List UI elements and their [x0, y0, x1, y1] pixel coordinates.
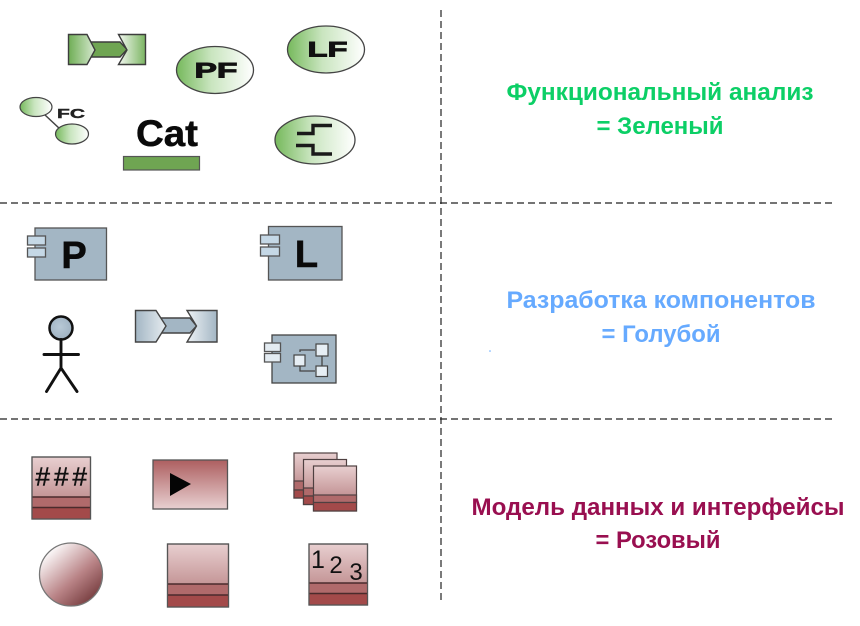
panel: data model and interface icons — [32, 453, 368, 607]
icon: play screen — [153, 460, 228, 509]
panel: component development icons — [28, 226, 491, 392]
icon: stacked tables — [294, 453, 356, 511]
icon: 123 table: 3 — [349, 559, 363, 586]
icon: P component — [28, 228, 106, 280]
icon: LF ellipse: LF — [308, 38, 348, 62]
icon: ### table: ### — [36, 462, 88, 492]
icon: ### table — [32, 457, 90, 519]
icon: plain table — [168, 544, 228, 607]
icon: blue connector — [136, 310, 217, 342]
icon: L component — [260, 226, 342, 280]
stray blue dot — [489, 350, 491, 352]
icon: actor stick figure — [44, 316, 78, 392]
icon: logical function ellipse — [275, 116, 355, 164]
icon: L component: L — [295, 234, 318, 276]
icon: PF ellipse: PF — [194, 60, 238, 82]
text block: functional analysis = green — [506, 79, 814, 140]
icon: FC linked ellipses — [20, 98, 88, 144]
icon: sphere — [40, 543, 102, 606]
text block: functional analysis = green: = Зеленый — [596, 113, 724, 140]
text block: component development = blue: Разработка компонентов — [506, 287, 816, 314]
icon: PF ellipse — [176, 46, 254, 94]
icon: LF ellipse — [288, 26, 364, 73]
icon: 123 table — [309, 544, 368, 605]
icon: component with structure — [264, 335, 336, 383]
icon: Cat category: Cat — [136, 113, 198, 154]
icon: Cat category — [124, 113, 200, 170]
icon: FC linked ellipses: FC — [57, 106, 86, 121]
text block: data model and interfaces = pink: Модель данных и интерфейсы — [472, 494, 844, 521]
icon: P component: P — [61, 235, 87, 277]
text block: data model and interfaces = pink: = Розовый — [596, 527, 720, 554]
icon: 123 table: 2 — [329, 552, 343, 579]
text block: functional analysis = green: Функциональный анализ — [506, 79, 814, 106]
text block: data model and interfaces = pink — [472, 494, 844, 554]
text block: component development = blue — [506, 287, 816, 348]
text block: component development = blue: = Голубой — [602, 321, 720, 348]
icon: green connector — [68, 34, 146, 64]
panel: functional analysis icons — [20, 26, 364, 170]
icon: 123 table: 1 — [311, 546, 325, 574]
